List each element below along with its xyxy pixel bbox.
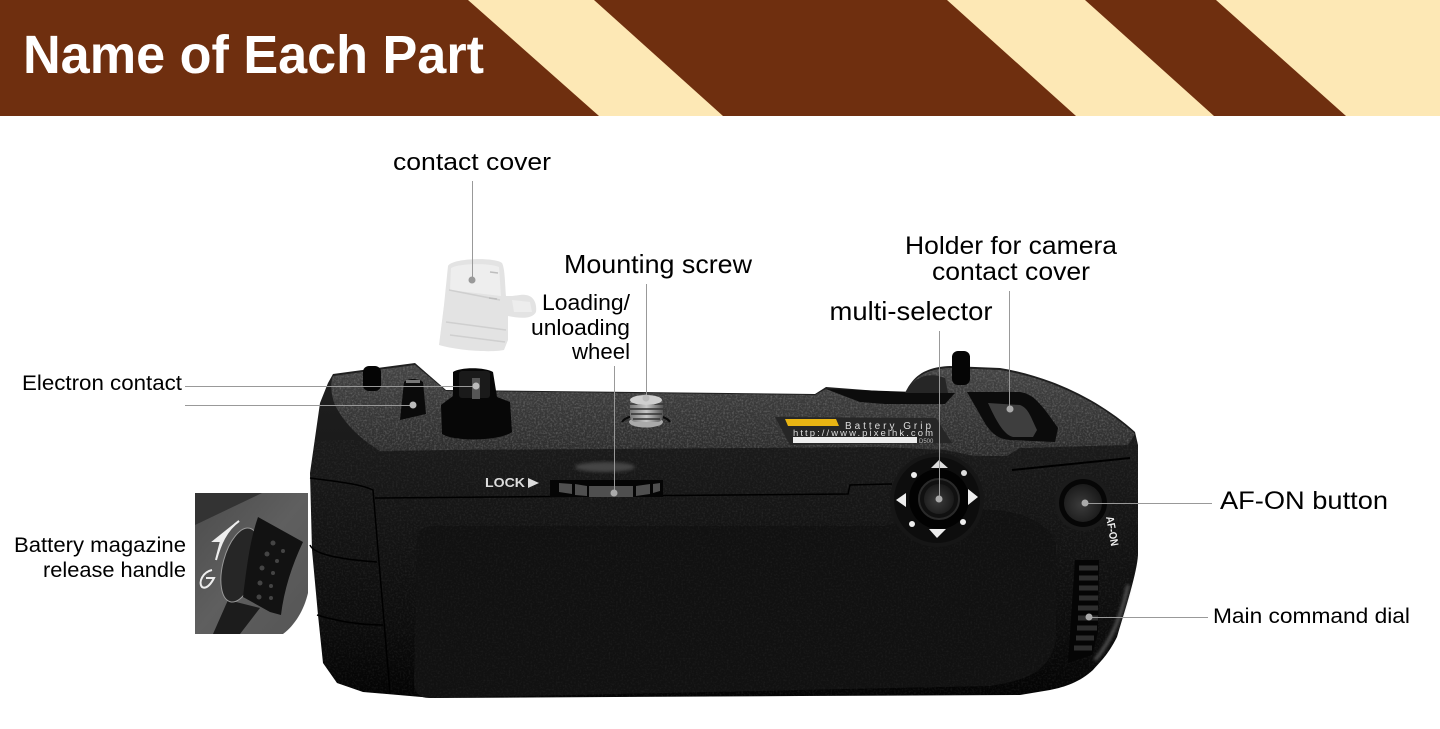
label: loading/unloading wheel: unloading [531,315,630,340]
photo inset: battery magazine release handle [195,493,308,634]
top switch [952,351,970,385]
label: battery magazine release handle: release handle [43,559,186,582]
lock label: LOCK [485,475,526,490]
product label [775,417,952,445]
photo: battery grip [305,351,1145,701]
label: holder for camera contact cover: contact cover [932,258,1090,286]
title: Name of Each Part [23,25,484,85]
label: multi-selector [830,296,993,502]
recess near right tower [826,389,955,404]
body edge highlight [1095,585,1128,660]
label: battery magazine release handle [14,534,186,582]
label: holder for camera contact cover [905,232,1117,412]
AF-ON button [1055,475,1120,547]
label: holder for camera contact cover: Holder for camera [905,232,1117,260]
lock arrow [528,478,539,488]
rubber grip [414,509,1056,698]
left posts [363,366,381,391]
label: loading/unloading wheel: wheel [571,339,630,364]
label: AF-ON button: AF-ON button [1220,487,1388,515]
label: electron contact [22,372,480,408]
label: multi-selector: multi-selector [830,296,993,326]
product label: Battery Grip [845,421,931,432]
label: main command dial: Main command dial [1213,605,1410,628]
label: electron contact: Electron contact [22,372,182,395]
mounting screw [622,395,670,428]
label: AF-ON button [1082,487,1388,515]
AF-ON button: AF-ON [1103,515,1120,547]
grip body [310,363,1138,698]
label: loading/unloading wheel: Loading/ [542,290,631,315]
label: mounting screw: Mounting screw [564,249,752,279]
label: battery magazine release handle: Battery magazine [14,534,186,557]
loading wheel [550,462,663,497]
label: loading/unloading wheel [531,290,631,496]
product label: http://www.pixelhk.com [793,428,933,439]
header banner [0,0,1440,116]
multi-selector [890,453,984,547]
main command dial [1068,560,1099,663]
contact tower [441,368,512,439]
photo: contact cover [439,259,536,351]
holder for contact cover [967,392,1058,442]
product label: D500 [919,439,934,445]
top plate [331,365,1135,456]
body seam lines [310,478,892,693]
front face speckle [305,440,1145,700]
label: main command dial [1086,605,1410,628]
label: mounting screw [564,249,752,402]
label: contact cover: contact cover [393,149,551,176]
label: contact cover [393,149,551,284]
